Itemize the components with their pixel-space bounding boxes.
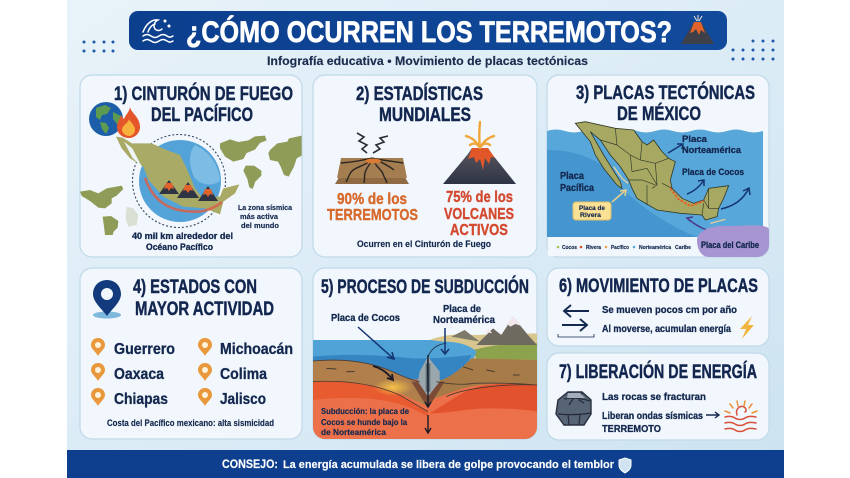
heading 3: 3) PLACAS TECTÓNICAS: [576, 80, 755, 104]
heading 4: 4) ESTADOS CON: [133, 276, 257, 298]
caption: zona sísmica: [238, 203, 293, 230]
dots decoration right: [732, 40, 774, 60]
header banner: [129, 11, 727, 50]
state list: Colima: [220, 366, 267, 383]
ocean: [547, 130, 763, 237]
arrow: Norteamérica: [441, 328, 449, 354]
heading 6: 6) MOVIMIENTO DE PLACAS: [559, 275, 758, 297]
heading 2: [356, 82, 483, 126]
text: movement: Al moverse, acumulan energía: [602, 324, 731, 335]
label: Placa de Norteamérica: Placa de: [443, 303, 481, 315]
consejo text: CONSEJO:: [222, 459, 278, 471]
label: Placa de Norteamérica: Norteamérica: [433, 314, 495, 326]
label: Placa del Caribe: Placa del Caribe: [701, 240, 759, 251]
label: Placa de Rivera: Placa de: [579, 205, 605, 212]
volcanoes on map: [159, 180, 218, 201]
icon: globe: [89, 102, 123, 136]
icon: volcano: [681, 15, 714, 44]
dots decoration left: [82, 40, 114, 52]
icon: opposing arrows: [558, 305, 594, 337]
caption: subducción: Cocos se hunde bajo la: [321, 418, 408, 427]
caption: costa del Pacífico: Costa del Pacífico mexicano: alta sismicidad: [107, 418, 274, 428]
stat: 75% volcanes: VOLCANES: [444, 206, 514, 223]
label: Placa Pacífica: Placa: [560, 171, 584, 182]
label: Placa Pacífica: Pacífica: [560, 183, 594, 194]
arrow: plate motion: [373, 366, 393, 380]
darker Pacific water: [547, 150, 697, 237]
ocean circle: [139, 140, 221, 222]
legend: Pacífico: [611, 245, 629, 251]
panel: 7 liberación de energía: [547, 353, 769, 440]
icon: ocean wave: [143, 20, 173, 42]
map of Mexico with states: [575, 122, 729, 223]
icon: seismic waves: [725, 401, 757, 432]
icon: erupting volcano: [443, 122, 516, 184]
arrow: Placa de Cocos: [358, 327, 394, 359]
icon: flame: [117, 107, 140, 138]
caption: 40 mil km: 40 mil km alrededor del: [132, 231, 233, 241]
panel: 6 movimiento de placas: [547, 268, 769, 346]
stat: 90% terremotos: [327, 191, 418, 224]
heading 2: MUNDIALES: [379, 104, 471, 126]
bottom banner: [67, 450, 784, 478]
caption: subducción: Subducción: la placa de: [321, 407, 410, 416]
subtitle: Infografía educativa • Movimiento de placas tectónicas: [267, 54, 588, 68]
dashed circle ring: [132, 134, 226, 228]
world map continents: [80, 136, 302, 235]
label: Placa Norteamérica: Norteamérica: [682, 145, 742, 156]
state markers: [91, 338, 212, 406]
text: release: Las rocas se fracturan: [602, 391, 706, 403]
heading 1: [114, 81, 293, 126]
state list: [114, 341, 293, 408]
arrow: to earthquake: [706, 412, 719, 418]
caption: cinturón de fuego: Ocurren en el Cinturón de Fuego: [357, 239, 491, 250]
legend: [548, 237, 698, 256]
stat: 75% volcanes: 75% de los: [446, 189, 513, 206]
caption: 40 mil km: Océano Pacífico: [146, 242, 213, 252]
heading 4: [133, 276, 274, 320]
icon: fractured rock: [556, 392, 591, 425]
arrow: into mantle: [425, 355, 431, 433]
panel: 2 estadísticas mundiales: [313, 75, 537, 257]
legend: Cocos: [562, 245, 577, 251]
caption: subducción: de Norteamérica: [321, 428, 387, 437]
heading 4: MAYOR ACTIVIDAD: [135, 298, 274, 320]
caption: zona sísmica: más activa: [240, 212, 279, 221]
subduction diagram: [313, 317, 537, 440]
legend: Rivera: [586, 245, 601, 251]
legend: Caribe: [675, 245, 691, 251]
stat: 75% volcanes: [444, 189, 514, 239]
label: Placa de Cocos: Placa de Cocos: [331, 312, 400, 324]
caption: zona sísmica: del mundo: [241, 221, 279, 230]
heading 7: 7) LIBERACIÓN DE ENERGÍA: [559, 359, 757, 383]
page background: [67, 0, 784, 452]
plate arrows: [612, 144, 750, 233]
heading 1: DEL PACÍFICO: [151, 103, 253, 126]
legend: Norteamérica: [639, 245, 671, 251]
stat: 90% terremotos: 90% de los: [337, 191, 407, 208]
map of Mexico: [116, 137, 239, 214]
heading 2: 2) ESTADÍSTICAS: [356, 82, 483, 105]
heading 3: [576, 80, 755, 125]
caption: 40 mil km: [132, 231, 233, 252]
icon: location pin: [93, 280, 121, 318]
state list: Oaxaca: [114, 366, 164, 383]
caption: subducción: [321, 407, 410, 437]
panel: 5 proceso de subducción: [313, 268, 537, 440]
icon: cracked ground: [335, 133, 409, 184]
panel: 3 placas tectónicas de México: [547, 75, 769, 257]
title: ¿CÓMO OCURREN LOS TERREMOTOS?: [186, 15, 672, 49]
label: Placa de Cocos: Placa de Cocos: [682, 167, 744, 178]
heading 5: 5) PROCESO DE SUBDUCCIÓN: [321, 274, 529, 298]
panel: 1 cinturón de fuego: [80, 75, 302, 257]
label: Placa Pacífica: [560, 171, 594, 194]
heading 1: 1) CINTURÓN DE FUEGO: [114, 81, 293, 105]
stat: 75% volcanes: ACTIVOS: [450, 222, 508, 239]
label: Placa de Rivera: [573, 202, 611, 220]
text: release: [602, 391, 706, 435]
state list: Chiapas: [114, 391, 168, 408]
caption: zona sísmica: La zona sísmica: [238, 203, 293, 212]
consejo text: La energía acumulada se libera de golpe provocando el temblor: [283, 459, 615, 471]
label: Placa del Caribe: [697, 225, 769, 257]
label: Placa de Rivera: Rivera: [580, 212, 601, 219]
label: Placa de Norteamérica: [433, 303, 495, 326]
ring of fire arc: [145, 178, 222, 212]
text: movement: Se mueven pocos cm por año: [602, 304, 737, 316]
text: movement: [602, 304, 737, 335]
label: Placa Norteamérica: [682, 134, 742, 156]
panel: 4 estados con mayor actividad: [80, 268, 302, 439]
icon: shield: [619, 458, 631, 473]
icon: lightning: [740, 316, 754, 339]
heading 3: DE MÉXICO: [617, 102, 701, 125]
state list: Michoacán: [220, 341, 293, 358]
text: release: Liberan ondas sísmicas: [602, 410, 703, 422]
text: release: TERREMOTO: [602, 423, 661, 435]
state list: Jalisco: [220, 391, 266, 408]
state list: Guerrero: [114, 341, 175, 358]
stat: 90% terremotos: TERREMOTOS: [327, 207, 418, 224]
label: Placa Norteamérica: Placa: [682, 134, 708, 145]
